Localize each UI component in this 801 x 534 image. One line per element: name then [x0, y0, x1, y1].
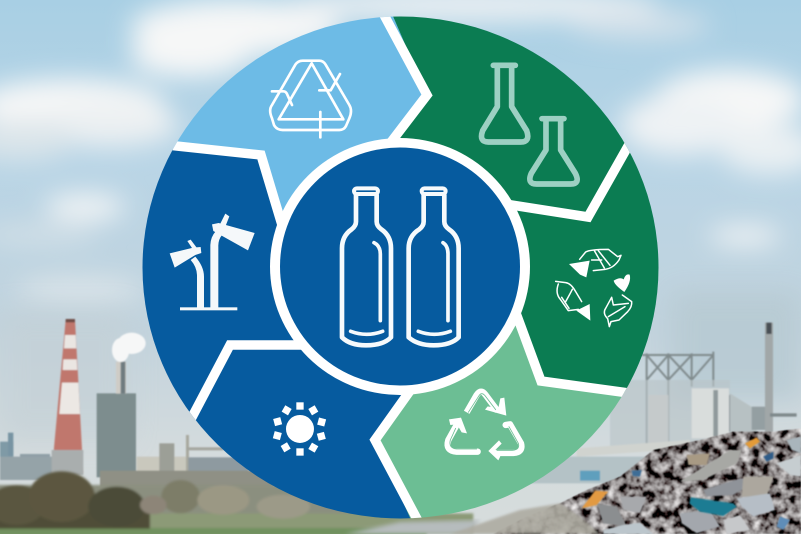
- icon: recycling triangle outline: [270, 61, 351, 137]
- cycle disc: [142, 16, 658, 518]
- segment: blue left: [142, 148, 294, 418]
- icon: two laboratory flasks: [481, 65, 577, 184]
- segment: light blue: [173, 16, 422, 211]
- background: waste pile: [450, 428, 801, 534]
- icon: recycling arrows: [448, 392, 521, 460]
- center circle: [270, 138, 530, 395]
- icon: two glass bottles: [342, 188, 459, 345]
- icon: mirror lamps on stands: [170, 214, 255, 310]
- segment: blue bottom: [194, 350, 410, 518]
- background: industrial plant right: [527, 323, 797, 483]
- segment: mint: [380, 326, 624, 518]
- segment: dark green right: [517, 148, 658, 392]
- background: bottom road: [345, 520, 480, 534]
- segment: dark green top: [393, 16, 628, 212]
- icon: recycling arrows with bottles: [556, 249, 632, 327]
- icon: sun: [273, 402, 326, 456]
- background: power plant and trees: [0, 319, 473, 534]
